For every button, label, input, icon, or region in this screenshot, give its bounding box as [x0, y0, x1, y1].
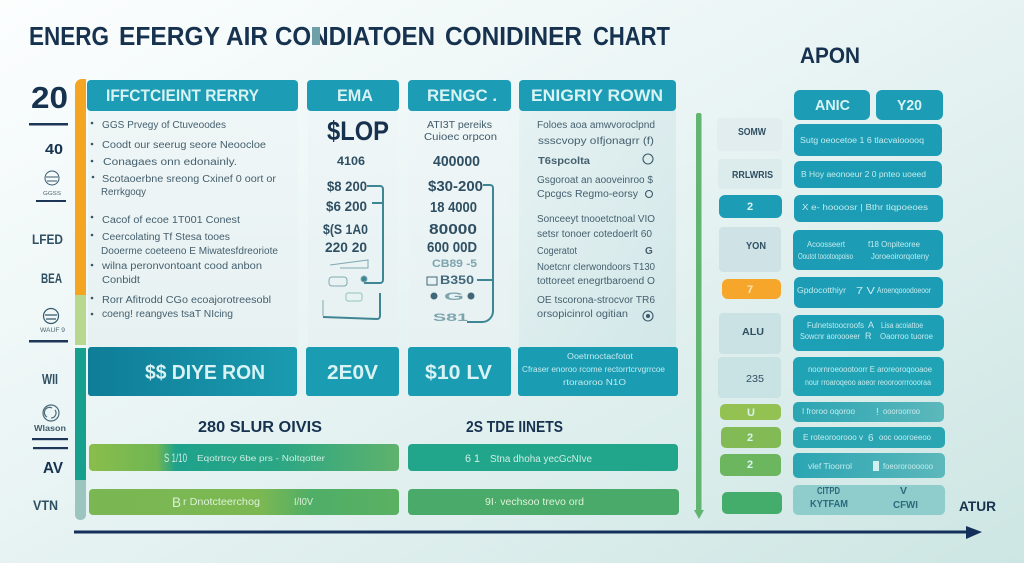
- header text: range: RENGC .: [427, 86, 497, 105]
- title: CONDIATOEN: [275, 23, 435, 51]
- row text: Fulnetstoocroofs: [807, 321, 864, 330]
- panel: range column: [408, 80, 511, 347]
- last row text: [810, 485, 918, 511]
- title: CHART: [593, 23, 670, 51]
- header: range: [408, 80, 511, 111]
- comparison table: labels: 2: [747, 459, 753, 471]
- description: [424, 119, 497, 143]
- bar four: [408, 489, 679, 515]
- row text: R: [865, 331, 872, 341]
- small appliance icons: [323, 260, 368, 316]
- row text: [797, 136, 934, 471]
- title: AIR: [226, 23, 268, 51]
- arrow: vertical green: [694, 113, 704, 519]
- value list: [427, 153, 483, 256]
- last row text: V: [900, 485, 907, 497]
- cell text: $10 LV: $10 LV: [425, 362, 493, 384]
- icon: bin: [873, 461, 879, 471]
- bar two: [408, 444, 678, 471]
- energy notes: setsr tonoer cotedoerlt 60: [537, 229, 652, 240]
- comparison table: labels: RRLWRIS: [732, 169, 773, 181]
- vertical colour bar: [75, 79, 86, 520]
- header: EMA: [307, 80, 399, 111]
- cell text: notes: Ooetrnoctacfotot: [567, 352, 634, 361]
- energy notes: Cogeratot: [537, 246, 577, 257]
- icon: gauge one: [45, 171, 59, 185]
- bullet list: [91, 120, 278, 320]
- energy notes: Sonceeyt tnooetctnoal VIO: [537, 214, 655, 225]
- energy notes: tottoreet enegrtbaroend O: [537, 276, 655, 287]
- cell: 2E0V: [306, 347, 399, 396]
- bar one: [89, 444, 399, 471]
- bullet list: Scotaoerbne sreong Cxinef 0 oort or: [102, 174, 277, 185]
- comparison table: labels: 2: [747, 432, 753, 444]
- last row text: CITPD: [817, 485, 840, 497]
- header text: EMA: EMA: [337, 86, 373, 105]
- row text: !: [876, 407, 879, 418]
- cell text: dollars: $$ DIYE RON: [145, 362, 265, 384]
- row text: B Hoy aeonoeur 2 0 pnteo uoeed: [801, 170, 926, 179]
- label: 20: 20: [31, 80, 68, 115]
- value list: 400000: [433, 153, 480, 170]
- energy notes: T6spcolta: [538, 156, 590, 167]
- connector and icons: [467, 185, 493, 322]
- comparison table: labels: YON: [746, 240, 766, 252]
- bar three text: r Dnotcteerchog: [183, 497, 260, 508]
- price list: $6 200: [326, 198, 367, 214]
- value list: 600 00D: [427, 239, 477, 256]
- header text: efficient: IFFCTCIEINT RERRY: [106, 86, 260, 105]
- cell: $10 LV: [408, 347, 511, 396]
- row text: oooroorroo: [883, 407, 921, 416]
- energy notes: ssscvopy oIfjonagrr (f): [538, 136, 654, 147]
- last row text: CFWI: [893, 499, 918, 511]
- label: WII: WII: [42, 371, 58, 388]
- bullet list: Conbidt: [102, 275, 140, 286]
- value list: $30-200: [428, 178, 483, 195]
- row text: Sutg oeocetoe 1 6 tlacvaiooooq: [800, 136, 924, 145]
- title: EFERGY: [119, 23, 220, 51]
- comparison table: labels: [717, 118, 782, 514]
- summary row: [88, 347, 678, 396]
- row text: foeororoooooo: [883, 462, 934, 471]
- icon: swirl: [43, 405, 59, 421]
- row text: f18 Onpiteoree: [868, 240, 921, 249]
- bar three text: I/I0V: [294, 497, 313, 508]
- bullet list: Cacof of ecoe 1T001 Conest: [102, 215, 240, 226]
- label: VTN: VTN: [33, 497, 58, 513]
- comparison table: labels: U: [747, 407, 755, 419]
- bullet list: Conagaes onn edonainly.: [103, 157, 237, 168]
- bar two text: 6 1: [465, 453, 480, 465]
- header: energy: [519, 80, 676, 111]
- cell text: notes: Cfraser enoroo rcome rectorrtcrvgrrcoe: [522, 365, 666, 374]
- comparison table: labels: 235: [746, 373, 764, 385]
- row text: E roteoroorooo v: [803, 433, 863, 442]
- row text: Lisa acoiattoe: [881, 321, 923, 330]
- row text: vlef Tioorrol: [808, 462, 852, 471]
- green bars: [89, 444, 679, 515]
- price list: $(S 1A0: [323, 221, 368, 237]
- energy notes: G: [645, 246, 653, 257]
- label: LFED: LFED: [32, 231, 63, 247]
- comparison table: rows: [793, 124, 945, 515]
- header text: energy: ENIGRIY ROWN: [531, 86, 663, 105]
- subheading: left: 280 SLUR OIVIS: [198, 419, 322, 436]
- bullet list: Ceercolating Tf Stesa tooes: [102, 232, 230, 243]
- value list: 80000: [429, 221, 477, 238]
- cell text: 2E0V: 2E0V: [327, 362, 379, 384]
- small circle icons: [643, 154, 653, 321]
- bullet list: Rorr Afitrodd CGo ecoajorotreesobl: [102, 295, 271, 306]
- bar one text: S 1/10: [164, 451, 187, 465]
- icon: gauge two: [44, 308, 58, 324]
- row text: Acoosseert: [807, 240, 846, 249]
- row text: A: [868, 320, 874, 330]
- small values: [432, 258, 477, 324]
- bullet list: Dooerme coeteeno E Miwatesfdreoriote: [101, 246, 278, 257]
- row text: noornroeoootoorr E aroreoroqooaoe: [808, 365, 933, 374]
- price list: [323, 154, 368, 255]
- bar three: [89, 489, 399, 515]
- label: gauge two: WAUF 9: [40, 327, 65, 334]
- price list: 4106: [337, 154, 365, 168]
- row text: ooc oooroeeoo: [879, 433, 932, 442]
- connector lines: [323, 186, 383, 319]
- row text: nour rroaroqeoo aoeor reooroorrroooraa: [805, 378, 931, 387]
- cell text: notes: [522, 352, 666, 387]
- cell text: notes: rtoraoroo N1O: [563, 378, 626, 387]
- label: AV: AV: [43, 460, 63, 477]
- comparison table: headers: Y20: [897, 97, 922, 114]
- cell: notes: [518, 347, 678, 396]
- value list: 18 4000: [430, 199, 477, 216]
- bar one text: Eqotrtrcy 6be prs - Noltqotter: [197, 453, 325, 463]
- energy notes: [537, 120, 655, 320]
- panel: energy column: [519, 80, 676, 347]
- panel: EMA column: [307, 80, 399, 347]
- title: CONIDINER: [445, 23, 582, 51]
- left year rail: [29, 80, 68, 513]
- comparison table: labels: 7: [747, 284, 753, 296]
- energy notes: Gsgoroat an aooveinroo $: [537, 175, 653, 186]
- bar three text: B: [172, 494, 181, 510]
- panel: efficiency column: [87, 80, 298, 347]
- row text: 7 V: [856, 286, 875, 297]
- row text: Aroenqooodoeoor: [877, 286, 931, 295]
- energy notes: Cpcgcs Regmo-eorsy: [537, 189, 638, 200]
- big price: $LOP: [327, 116, 389, 146]
- title: [29, 23, 670, 51]
- arrow: horizontal axis: [74, 526, 982, 539]
- header: efficient: [87, 80, 298, 111]
- last row text: KYTFAM: [810, 498, 848, 510]
- price list: $8 200: [327, 178, 367, 194]
- energy notes: OE tscorona-strocvor TR6: [537, 295, 655, 306]
- comparison table: headers: ANIC: [815, 97, 850, 114]
- row text: 6: [868, 433, 874, 444]
- small values: B350: [440, 273, 474, 287]
- bar three text: [172, 494, 313, 510]
- bar one text: [164, 451, 325, 465]
- label: BEA: BEA: [41, 270, 62, 286]
- bar two text: Stna dhoha yecGcNIve: [490, 454, 592, 465]
- title: ENERG: [29, 23, 109, 51]
- row text: Oaorroo tuoroe: [880, 332, 934, 341]
- comparison table: headers: [794, 90, 943, 120]
- label: 40: 40: [45, 141, 63, 158]
- description: Cuioec orpcon: [424, 131, 497, 143]
- energy notes: Foloes aoa amwvoroclpnd: [537, 120, 655, 131]
- energy notes: Noetcnr cIerwondoors T130: [537, 262, 655, 273]
- cell: dollars: [88, 347, 297, 396]
- row text: I froroo oqoroo: [802, 407, 856, 416]
- price list: 220 20: [325, 239, 367, 255]
- row text: X e- hoooosr | Bthr tiqpoeoes: [802, 203, 928, 212]
- row text: Gpdocotthiyr: [797, 286, 846, 295]
- subheading: right: 2S TDE IINETS: [466, 419, 563, 436]
- bullet list: GGS Prvegy of Ctuveoodes: [102, 120, 226, 131]
- row text: Joroeoirorqoteny: [871, 252, 929, 261]
- bullet list: Rerrkgoqy: [101, 187, 146, 198]
- comparison table: labels: ALU: [742, 326, 764, 338]
- bullet list: coeng! reangves tsaT NIcing: [102, 309, 233, 320]
- description: ATI3T pereiks: [427, 119, 492, 131]
- label: Wlason: Wlason: [34, 423, 66, 433]
- right heading: APON: [800, 43, 860, 68]
- small values: S81: [433, 312, 468, 324]
- bar four text: 9I· vechsoo trevo ord: [485, 497, 584, 508]
- comparison table: labels: SOMW: [738, 126, 766, 138]
- row text: Ooutot toootoopoiso: [798, 252, 853, 261]
- small values: CB89 -5: [432, 258, 477, 270]
- axis label: ATUR: [959, 498, 996, 514]
- bullet list: Coodt our seerug seore Neoocloe: [102, 140, 266, 151]
- small values: G: [444, 291, 464, 303]
- row text: Sowcnr aoroooeer: [800, 332, 860, 341]
- bullet list: wilna peronvontoant cood anbon: [101, 261, 262, 272]
- energy notes: orsopicinrol ogitian: [537, 309, 628, 320]
- label: gauge one: GGSS: [43, 191, 61, 197]
- comparison table: labels: 2: [747, 201, 753, 213]
